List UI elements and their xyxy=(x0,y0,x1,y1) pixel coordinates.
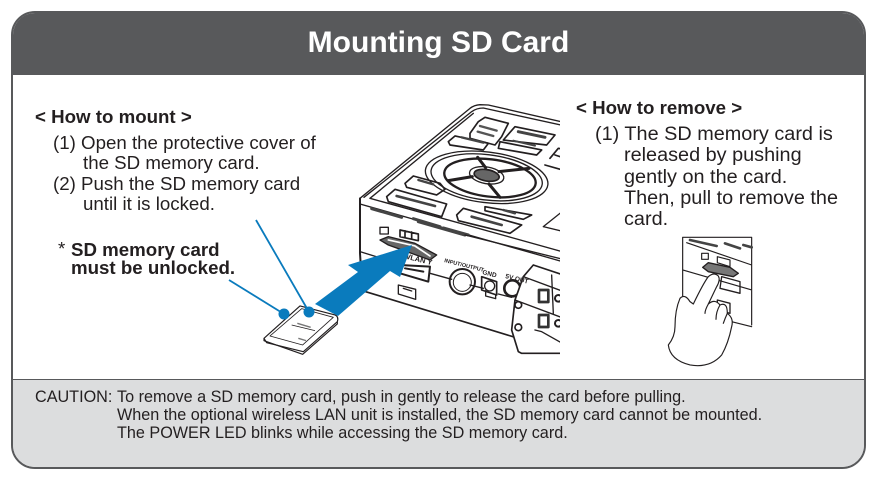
text block: how to remove: (1) The SD memory card is xyxy=(595,123,833,145)
directional pad xyxy=(424,150,549,204)
text block: how to remove: gently on the card. xyxy=(624,166,787,188)
text block: how to remove: < How to remove > xyxy=(576,97,742,118)
device labels: 5V OUT xyxy=(505,273,529,286)
caution text: CAUTION: xyxy=(35,388,112,406)
arrow: insert direction xyxy=(315,245,412,316)
screen xyxy=(542,212,560,232)
device labels xyxy=(407,254,529,284)
input/output connector xyxy=(450,269,475,294)
heading band xyxy=(13,13,864,75)
text block: how to mount: (2) Push the SD memory card xyxy=(53,173,300,194)
terminal block xyxy=(510,264,560,354)
text block: how to remove: Then, pull to remove the xyxy=(624,187,838,209)
GND terminal xyxy=(482,277,497,295)
text block: how to mount: < How to mount > xyxy=(35,106,192,127)
text block: how to remove: card. xyxy=(624,208,668,230)
slot and card xyxy=(380,227,388,234)
caution text xyxy=(35,388,762,442)
caution text: The POWER LED blinks while accessing the SD memory card. xyxy=(117,424,568,442)
text block: how to remove: released by pushing xyxy=(624,144,802,166)
note: unlocked xyxy=(58,238,235,278)
device top face xyxy=(360,105,568,263)
device front face xyxy=(360,220,568,353)
hand xyxy=(668,274,732,366)
5V output xyxy=(504,280,520,296)
device labels: INPUT/OUTPUT xyxy=(444,258,485,274)
lower buttons xyxy=(405,176,445,195)
top labels xyxy=(372,209,468,235)
text block: how to remove xyxy=(576,97,838,230)
note: unlocked: SD memory card xyxy=(71,239,220,260)
caution band xyxy=(13,379,864,468)
title: Mounting SD Card xyxy=(308,26,569,59)
caution text: When the optional wireless LAN unit is installed, the SD memory card cannot be mounted. xyxy=(117,406,762,424)
illustration: SD card xyxy=(264,306,338,354)
callout: leader lines xyxy=(229,220,314,320)
note: unlocked: must be unlocked. xyxy=(71,257,235,278)
text block: how to mount: the SD memory card. xyxy=(83,152,260,173)
device labels: GND xyxy=(482,269,498,280)
note: unlocked: * xyxy=(58,238,65,259)
text block: how to mount xyxy=(35,106,316,214)
upper buttons xyxy=(470,117,508,145)
illustration: recorder device xyxy=(360,105,568,353)
text block: how to mount: (1) Open the protective cover of xyxy=(53,132,316,153)
text block: how to mount: until it is locked. xyxy=(83,193,215,214)
illustration: hand pressing card xyxy=(668,237,752,366)
device labels: WLAN Y xyxy=(403,251,433,267)
caution text: To remove a SD memory card, push in gently to release the card before pulling. xyxy=(117,388,686,406)
